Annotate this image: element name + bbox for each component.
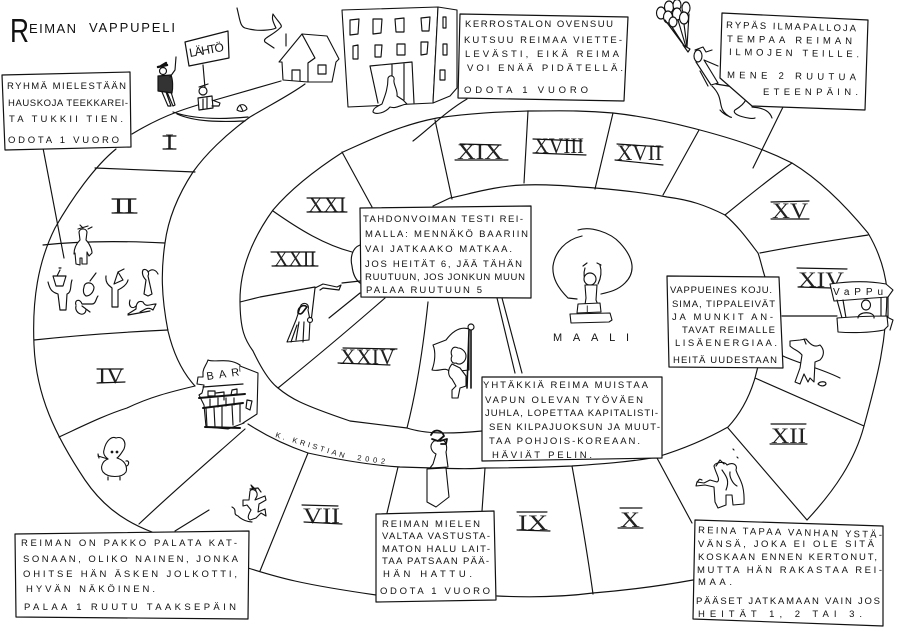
callout: look back at woman: PALAA 1 RUUTU TAAKSEPÄIN (24, 602, 236, 613)
callout: willpower test (360, 206, 531, 298)
roman numeral: XIX: XIX (457, 139, 503, 164)
callout: look back at woman (15, 531, 249, 619)
callout: look back at woman: SONAAN, OLIKO NAINEN, JONKA (23, 554, 239, 565)
reveller two (76, 273, 98, 314)
figure: flag bearer (432, 324, 474, 398)
lying reveller (128, 300, 156, 315)
finish podium and winner (553, 229, 632, 323)
figure: statue with hat (427, 431, 449, 507)
callout: apartment doorway (458, 14, 628, 101)
callout: old friend: MAA. (698, 577, 732, 588)
callout: old friend (693, 520, 883, 626)
copyright signature: K. KRISTIAN (274, 430, 346, 460)
title: VAPPUPELI (89, 20, 175, 35)
callout: balloons: ILMOJEN TEILLE. (729, 47, 859, 60)
callout: old friend: KOSKAAN ENNEN KERTONUT, (698, 552, 877, 563)
callout: North Korea: TAA POHJOIS-KOREAAN. (489, 436, 640, 447)
title (10, 12, 175, 49)
sign: start (185, 31, 229, 88)
title: EIMAN (29, 21, 76, 36)
callout: teekkari blockade: ODOTA 1 VUORO (8, 135, 119, 146)
callout: statue hat: TAA PATSAAN PÄÄ- (382, 556, 489, 567)
roman numeral: II: II (113, 193, 135, 218)
callout: apartment doorway: LEVÄSTI, EIKÄ REIMA (465, 49, 620, 60)
roman numeral: XXI: XXI (308, 192, 346, 217)
centre arc behind callout (351, 245, 360, 283)
figure: flag carrier in XXIII (287, 284, 341, 342)
player at start line (198, 84, 220, 110)
callout: old friend: MUTTA HÄN RAKASTAA REI- (697, 565, 882, 576)
square dividers (34, 111, 868, 594)
pointers (43, 99, 783, 531)
callout: balloons: RYPÄS ILMAPALLOJA (726, 20, 857, 34)
callout: apartment doorway: VOI ENÄÄ PIDÄTELLÄ. (467, 63, 623, 74)
callout: willpower test: RUUTUUN, JOS JONKUN MUUN (365, 272, 525, 283)
reveller three (106, 269, 128, 307)
callout: statue hat: HÄN HATTU. (383, 569, 472, 580)
roman numeral: XII: XII (771, 423, 806, 448)
callout: willpower test: JOS HEITÄT 6, JÄÄ TÄHÄN (365, 259, 522, 270)
callout: North Korea: YHTÄKKIÄ REIMA MUISTAA (483, 380, 649, 391)
callout: statue hat: VALTAA VASTUSTA- (382, 531, 490, 542)
callout: statue hat (376, 511, 496, 602)
callout: North Korea: HÄVIÄT PELIN. (492, 450, 592, 461)
title: R (10, 12, 29, 49)
roman numeral: I (163, 129, 176, 154)
callout: willpower test: TAHDONVOIMAN TESTI REI- (363, 214, 523, 225)
callout: look back at woman: REIMAN ON PAKKO PALATA KAT- (21, 538, 237, 549)
conductor figure (158, 57, 176, 106)
callout: old friend: VÄNSÄ, JOKA EI OLE SITÄ (698, 539, 875, 550)
roman numeral: IV: IV (98, 363, 124, 388)
figure: running player (232, 485, 266, 522)
callout: look back at woman: OHITSE HÄN ÄSKEN JOLKOTTI, (23, 569, 237, 580)
reveller four (142, 269, 158, 296)
roman numeral: VII: VII (303, 503, 340, 528)
callout: teekkari blockade: TA TUKKII TIEN. (9, 114, 123, 125)
bar building: BAR (206, 366, 240, 383)
start line (173, 112, 248, 121)
outer road edge (34, 81, 887, 597)
callout: apartment doorway: KUTSUU REIMAA VIETTE- (464, 35, 622, 46)
callout: apartment doorway: ODOTA 1 VUORO (464, 85, 588, 96)
callout: balloons: TEMPAA REIMAN (727, 34, 852, 47)
callout: willpower test: MALLA: MENNÄKÖ BAARIIN (365, 229, 528, 240)
callout: old friend: PÄÄSET JATKAMAAN VAIN JOS (696, 596, 880, 607)
roman numeral: XVIII: XVIII (534, 133, 584, 158)
callout: willpower test: PALAA RUUTUUN 5 (366, 285, 482, 296)
callout: look back at woman: HYVÄN NÄKÖINEN. (26, 584, 155, 595)
flying player (694, 47, 772, 118)
figure: dog with bun (783, 339, 840, 386)
figure: hugging couple (696, 449, 744, 508)
roman numeral: X (618, 507, 643, 532)
sign: start: LÄHTÖ (188, 40, 225, 60)
callout: balloons: ETEENPÄIN. (763, 87, 858, 98)
roman numeral: I: I (165, 129, 174, 154)
roman numeral: IX: IX (518, 510, 548, 535)
callout: vappu stall: JA MUNKIT AN- (672, 312, 773, 323)
callout: teekkari blockade: HAUSKOJA TEEKKAREI- (8, 98, 128, 109)
callout: old friend: REINA TAPAA VANHAN YSTÄ- (698, 525, 882, 541)
bar building (197, 360, 258, 429)
callout: vappu stall: LISÄENERGIAA. (675, 338, 777, 349)
partygoers group (48, 225, 158, 315)
vappu stand (830, 282, 893, 333)
copyright signature (274, 430, 386, 466)
balloons (656, 0, 690, 52)
callout: vappu stall: SIMA, TIPPALEIVÄT (672, 299, 775, 310)
figure: round woman (98, 438, 129, 480)
callout: old friend: HEITÄT 1, 2 TAI 3. (698, 609, 862, 620)
callout: statue hat: REIMAN MIELEN (382, 519, 480, 530)
callout: willpower test: VAI JATKAAKO MATKAA. (365, 244, 512, 255)
inner road edge (162, 84, 766, 469)
stone on road (237, 105, 247, 111)
label: finish: MAALI (553, 332, 629, 344)
callout: North Korea (482, 377, 662, 461)
callout: statue hat: ODOTA 1 VUORO (380, 586, 490, 597)
roman numeral: X: X (620, 507, 640, 532)
reveller one (48, 268, 72, 310)
callout: balloons (720, 13, 868, 110)
vappu stand: VaPPu (833, 287, 883, 298)
roman numeral: II (112, 193, 137, 218)
roman numeral: XXII: XXII (274, 246, 316, 271)
callout: teekkari blockade: RYHMÄ MIELESTÄÄN (7, 81, 126, 92)
callout: balloons: MENE 2 RUUTUA (727, 70, 857, 83)
apartment building (342, 7, 457, 113)
callout: vappu stall: HEITÄ UUDESTAAN (673, 355, 777, 366)
house (237, 8, 339, 82)
finish podium and winner: I (586, 304, 589, 314)
roman numeral: XXIV: XXIV (340, 344, 395, 369)
callout: vappu stall: VAPPUEINES KOJU. (670, 285, 772, 296)
copyright signature: 2002 (357, 453, 386, 466)
callout: apartment doorway: KERROSTALON OVENSUU (465, 19, 613, 30)
roman numeral: XV: XV (772, 198, 808, 223)
callout: teekkari blockade (2, 72, 131, 150)
standing teekkari (74, 229, 92, 265)
roman numeral: XVII: XVII (617, 140, 662, 165)
callout: North Korea: SEN KILPAJUOKSUN JA MUUT- (489, 422, 660, 433)
callout: vappu stall (667, 276, 783, 368)
board: spiral game track (34, 81, 887, 597)
roman numeral: XIV: XIV (798, 267, 844, 292)
callout: North Korea: JUHLA, LOPETTAA KAPITALISTI- (485, 408, 658, 419)
callout: vappu stall: TAVAT REIMALLE (682, 325, 775, 336)
callout: statue hat: MATON HALU LAIT- (382, 544, 490, 555)
callout: North Korea: VAPUN OLEVAN TYÖVÄEN (485, 395, 643, 406)
